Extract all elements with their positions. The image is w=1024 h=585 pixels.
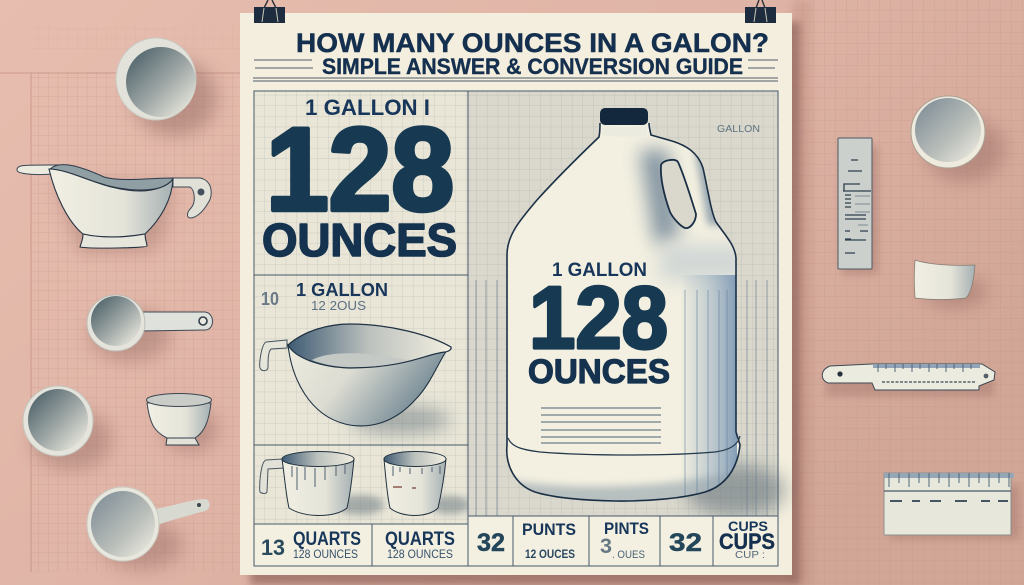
icon: handled ruler bbox=[822, 364, 995, 396]
text: faded pints number: 3 bbox=[600, 535, 612, 558]
jug label bbox=[528, 260, 670, 443]
text: quarts right: QUARTS bbox=[385, 529, 455, 550]
text: 32 left: 32 bbox=[477, 529, 505, 557]
title bbox=[296, 28, 769, 79]
panel: quarts labels bbox=[254, 524, 468, 566]
panel: jug column bbox=[468, 91, 785, 516]
jug label lines bbox=[541, 408, 661, 443]
icon: measuring card bbox=[838, 138, 878, 274]
icon: large spoon bbox=[87, 487, 210, 569]
jug corner label: GALLON bbox=[717, 124, 760, 135]
title: HOW MANY OUNCES IN A GALON? bbox=[296, 28, 769, 58]
big number 128: 128 bbox=[266, 104, 454, 236]
icon: small footed cup bbox=[146, 394, 218, 452]
icon: gallon jug bbox=[505, 108, 745, 510]
icon: jug handle opening bbox=[661, 160, 696, 228]
panel frame lines bbox=[254, 91, 778, 566]
text: jug ounces: OUNCES bbox=[528, 353, 670, 391]
text: ounces left: 128 OUNCES bbox=[293, 547, 358, 561]
icon: round bowl bbox=[911, 96, 1005, 182]
text: pints: PINTS bbox=[604, 519, 649, 538]
subtitle: SIMPLE ANSWER & CONVERSION GUIDE bbox=[322, 54, 743, 79]
text: cups small: CUPS bbox=[728, 518, 768, 534]
icon: wide ruler bbox=[884, 473, 1020, 539]
poster sheet bbox=[240, 13, 800, 585]
ounces label: OUNCES bbox=[262, 214, 457, 266]
panel: measuring cups bbox=[260, 452, 470, 516]
jug base ridge bbox=[508, 436, 740, 455]
icon: measuring spoon bbox=[87, 295, 212, 361]
icon: round cup top left bbox=[116, 38, 217, 136]
text: 12 ounces: 12 OUCES bbox=[525, 547, 575, 561]
icon: jug cap bbox=[600, 108, 648, 137]
icon: measuring cup with handle bbox=[260, 452, 384, 516]
panel: pints and cups labels bbox=[468, 516, 778, 566]
text: cups big: CUPS bbox=[719, 529, 775, 554]
binder clips bbox=[254, 0, 776, 23]
text: jug gallon: 1 GALLON bbox=[552, 260, 647, 281]
text: jug 128: 128 bbox=[529, 268, 668, 367]
text: punts: PUNTS bbox=[522, 520, 576, 539]
icon: small white cup bbox=[914, 260, 987, 306]
heading: 1 gallon: 1 GALLON I bbox=[305, 95, 430, 120]
panel: mixing bowl bbox=[260, 280, 451, 434]
text: quarts number: 13 bbox=[261, 535, 285, 560]
icon: mixing bowl bbox=[260, 324, 451, 434]
text: quarts left: QUARTS bbox=[293, 529, 361, 550]
text: ounces right: 128 OUNCES bbox=[387, 547, 453, 561]
text: faded ounces: 12 2OUS bbox=[311, 298, 366, 313]
panel: left grid column bbox=[254, 91, 470, 566]
text: cups faint: CUP : bbox=[735, 550, 765, 561]
text: 1 gallon: 1 GALLON bbox=[296, 280, 388, 300]
text: pints ounces: . OUES bbox=[612, 549, 645, 561]
icon: measuring cup plain bbox=[384, 452, 470, 516]
right tools bbox=[822, 96, 1020, 539]
icon: left binder clip bbox=[254, 0, 285, 23]
left tools bbox=[17, 38, 218, 569]
icon: right binder clip bbox=[745, 0, 776, 23]
icon: gravy boat bbox=[17, 165, 211, 252]
text: faded number: 10 bbox=[261, 289, 279, 309]
icon: shallow bowl bbox=[23, 386, 112, 470]
panel: headline answer bbox=[262, 95, 457, 266]
text: 32 right: 32 bbox=[669, 529, 702, 557]
